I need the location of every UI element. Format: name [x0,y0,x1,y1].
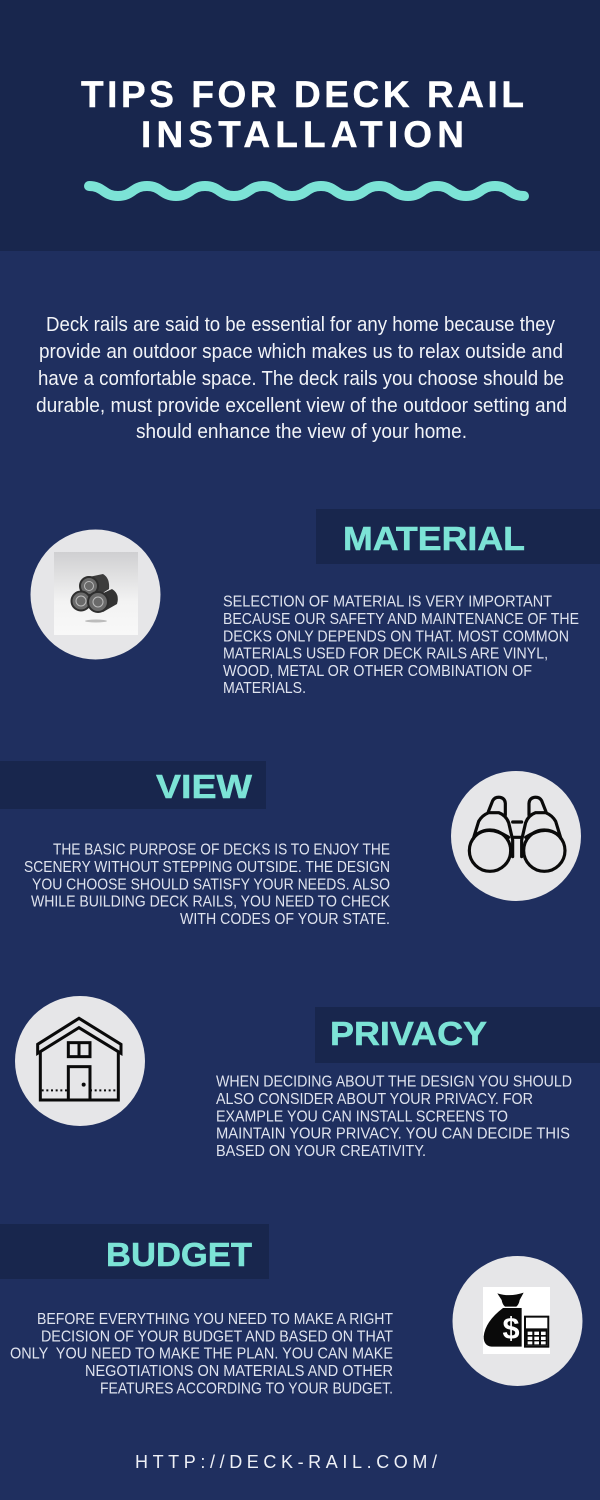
body text: material: MATERIALS USED FOR DECK RAILS ARE VINYL, [223,646,548,663]
body text: view: THE BASIC PURPOSE OF DECKS IS TO ENJOY THE [53,842,390,859]
body text: privacy: EXAMPLE YOU CAN INSTALL SCREENS TO [216,1108,508,1125]
header panel [0,0,600,251]
title: TIPS FOR DECK RAIL [81,74,524,115]
icon: house [15,996,145,1126]
heading bar: material [316,509,600,564]
heading bar: budget [0,1224,269,1279]
icon: stacked logs [30,530,160,660]
body text: view: SCENERY WITHOUT STEPPING OUTSIDE. THE DESIGN [24,859,390,876]
body text: privacy: ALSO CONSIDER ABOUT YOUR PRIVACY. FOR [216,1091,533,1108]
intro paragraph: Deck rails are said to be essential for any home because they [46,314,555,336]
heading bar: privacy [315,1007,600,1063]
section: material [30,509,600,697]
body text: privacy: WHEN DECIDING ABOUT THE DESIGN YOU SHOULD [216,1074,572,1091]
body text: budget: BEFORE EVERYTHING YOU NEED TO MAKE A RIGHT [37,1311,393,1328]
heading bar: material: MATERIAL [343,521,525,558]
icon: money bag and calculator: $ [502,1312,520,1346]
body text: privacy: BASED ON YOUR CREATIVITY. [216,1143,426,1160]
intro paragraph: provide an outdoor space which makes us to relax outside and [39,341,563,363]
body text: budget: ONLY YOU NEED TO MAKE THE PLAN. YOU CAN MAKE [10,1346,393,1363]
heading bar: privacy: PRIVACY [330,1016,487,1053]
section: view [0,761,581,928]
section: privacy [15,996,600,1160]
footer url: HTTP://DECK-RAIL.COM/ [135,1452,437,1472]
body text: privacy: MAINTAIN YOUR PRIVACY. YOU CAN DECIDE THIS [216,1126,570,1143]
body text: budget: FEATURES ACCORDING TO YOUR BUDGET. [100,1380,393,1397]
body text: view: WHILE BUILDING DECK RAILS, YOU NEED TO CHECK [31,894,391,911]
heading bar: view [0,761,266,809]
body text: view: YOU CHOOSE SHOULD SATISFY YOUR NEEDS. ALSO [32,876,390,893]
title: INSTALLATION [141,114,464,155]
wavy divider [89,186,524,196]
heading bar: budget: BUDGET [106,1237,253,1274]
section: budget [0,1224,582,1397]
body text: material: SELECTION OF MATERIAL IS VERY IMPORTANT [223,594,552,611]
body text: material: WOOD, METAL OR OTHER COMBINATION OF [223,663,532,680]
body text: budget [10,1311,393,1397]
intro paragraph [36,314,567,443]
body text: privacy [216,1074,572,1160]
intro paragraph: have a comfortable space. The deck rails you choose should be [38,368,564,390]
icon: money bag and calculator [452,1256,582,1386]
body text: material: DECKS ONLY DEPENDS ON THAT. MOST COMMON [223,628,569,645]
intro paragraph: durable, must provide excellent view of the outdoor setting and [36,395,567,417]
title [81,74,524,155]
intro paragraph: should enhance the view of your home. [136,421,467,443]
body text: budget: DECISION OF YOUR BUDGET AND BASED ON THAT [41,1328,393,1345]
body text: view: WITH CODES OF YOUR STATE. [180,911,390,928]
body text: material [223,594,579,697]
body text: view [24,842,391,928]
icon: binoculars [451,771,581,901]
heading bar: view: VIEW [156,769,252,806]
body text: budget: NEGOTIATIONS ON MATERIALS AND OTHER [85,1363,393,1380]
body text: material: MATERIALS. [223,680,306,697]
